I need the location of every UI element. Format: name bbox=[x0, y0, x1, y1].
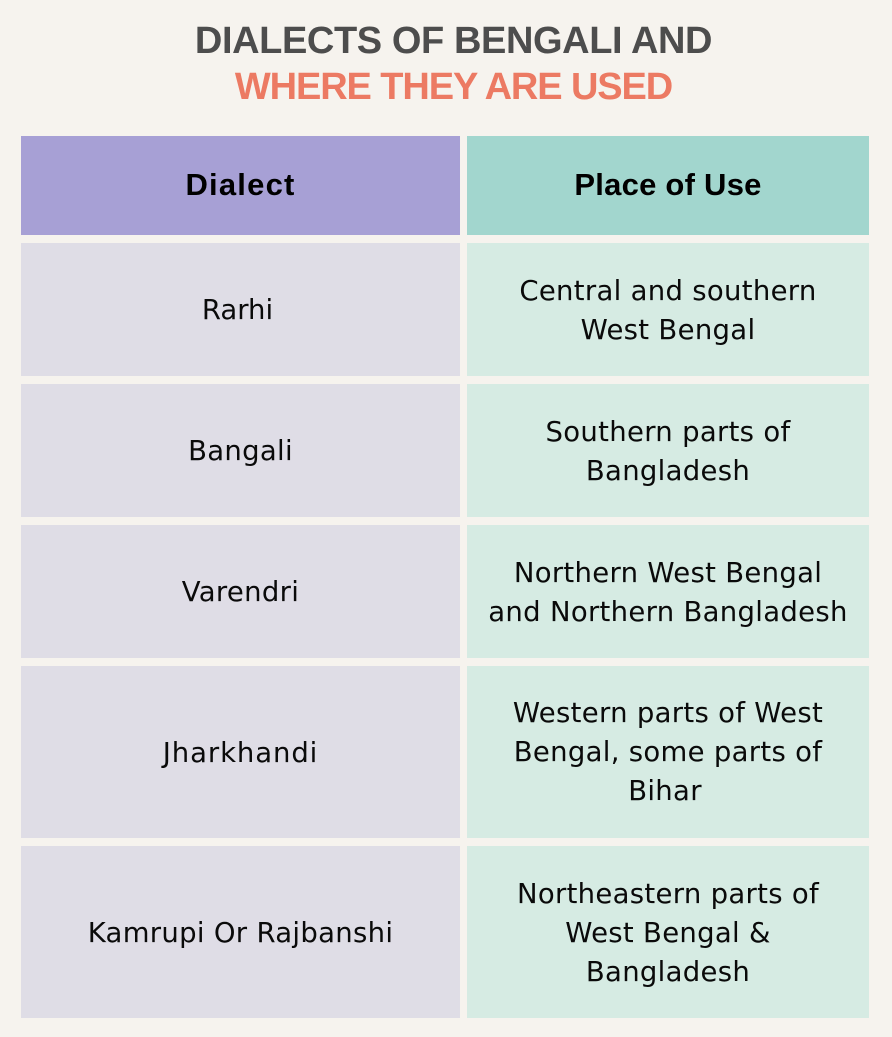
row 1 dialect: Rarhi bbox=[202, 294, 273, 326]
row 3 dialect bbox=[21, 525, 460, 658]
row 3 dialect: Varendri bbox=[182, 576, 299, 608]
row 5 dialect: Kamrupi Or Rajbanshi bbox=[88, 916, 393, 948]
header: Dialect bbox=[21, 136, 460, 235]
header: Place of Use bbox=[467, 136, 869, 235]
row 2 place bbox=[467, 384, 869, 517]
row 3 place bbox=[467, 525, 869, 658]
row 5 place bbox=[467, 846, 869, 1018]
row 1 place bbox=[467, 243, 869, 376]
header: Place of Use: Place of Use bbox=[574, 167, 762, 202]
title line 1: DIALECTS OF BENGALI AND bbox=[195, 20, 712, 62]
row 5 place: Northeastern parts of bbox=[517, 878, 819, 910]
row 1 dialect bbox=[21, 243, 460, 376]
row 4 dialect: Jharkhandi bbox=[163, 736, 318, 768]
row 4 dialect bbox=[21, 666, 460, 838]
row 2 place: Southern parts of bbox=[546, 416, 790, 448]
row 4 place: Bihar bbox=[628, 775, 702, 807]
row 2 dialect bbox=[21, 384, 460, 517]
title line 2: WHERE THEY ARE USED bbox=[235, 66, 672, 108]
row 3 place: Northern West Bengal bbox=[514, 556, 822, 588]
row 4 place: Bengal, some parts of bbox=[514, 736, 822, 768]
row 5 dialect bbox=[21, 846, 460, 1018]
row 3 place: and Northern Bangladesh bbox=[488, 596, 848, 628]
row 1 place: West Bengal bbox=[581, 314, 755, 346]
row 1 place: Central and southern bbox=[519, 274, 817, 306]
row 2 dialect: Bangali bbox=[188, 435, 293, 467]
row 2 place: Bangladesh bbox=[586, 454, 750, 486]
row 5 place: West Bengal & bbox=[565, 916, 771, 948]
header: Dialect: Dialect bbox=[185, 167, 296, 202]
row 4 place bbox=[467, 666, 869, 838]
title bbox=[195, 20, 712, 108]
row 5 place: Bangladesh bbox=[586, 956, 750, 988]
row 4 place: Western parts of West bbox=[513, 697, 823, 729]
